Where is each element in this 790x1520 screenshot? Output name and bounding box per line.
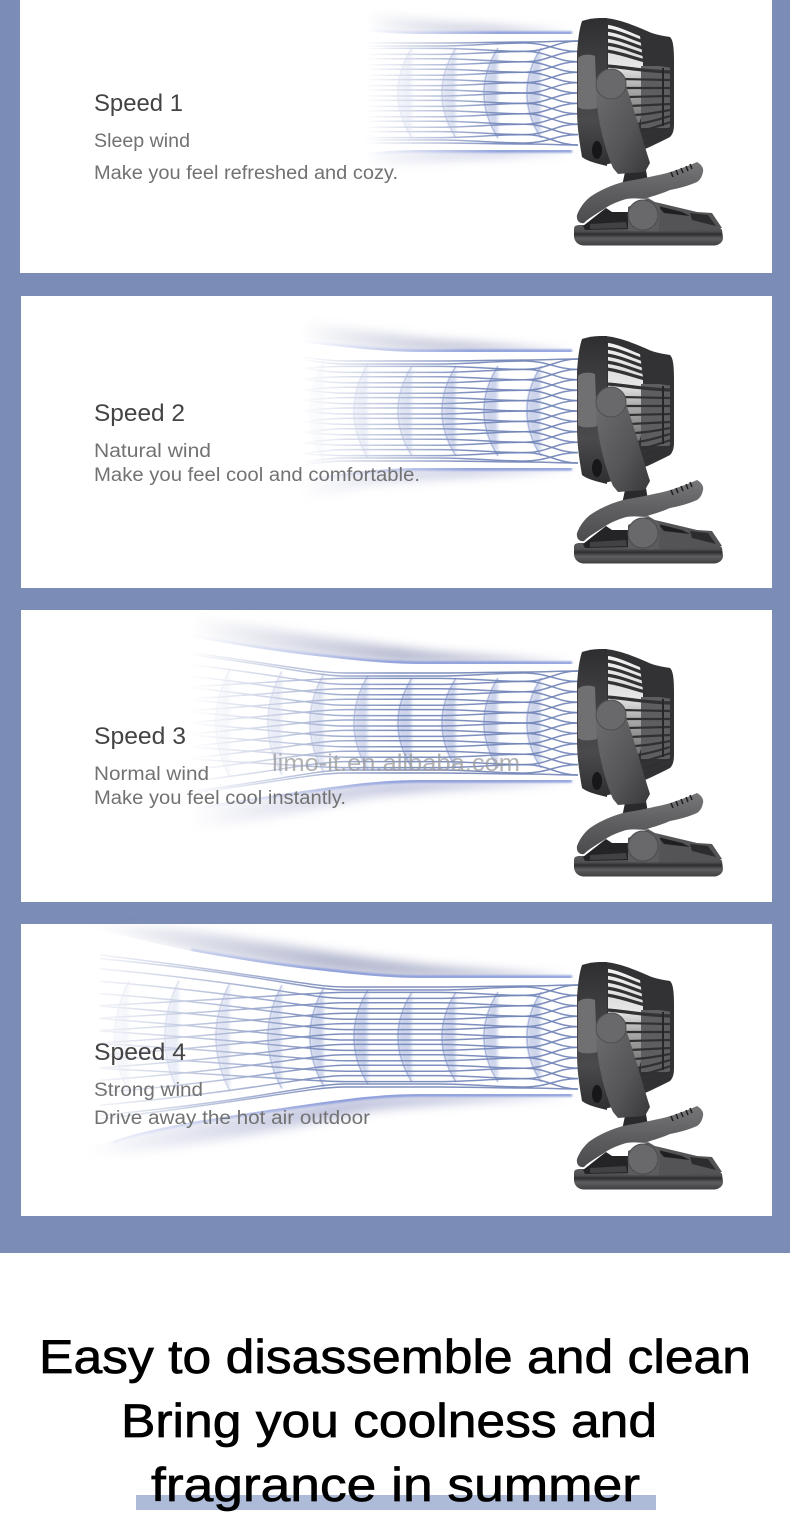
heading: speed 2: Speed 2 <box>94 400 185 427</box>
icon: clip fan 1 <box>574 18 723 246</box>
panel: speed 2 <box>21 296 772 588</box>
icon: clip fan 3 <box>574 649 723 876</box>
panel 2 card <box>21 296 772 588</box>
icon: clip fan 2 <box>574 336 723 564</box>
heading: speed 3: Speed 3 <box>94 723 186 750</box>
text: sleep wind: Sleep wind <box>94 131 190 152</box>
heading: speed 1: Speed 1 <box>94 90 183 117</box>
wind lines speed 2 <box>310 327 578 490</box>
wind lines speed 1 <box>374 16 578 164</box>
panel: speed 3 <box>21 610 772 902</box>
watermark: limo-it.en.alibaba.com <box>272 750 520 777</box>
title <box>39 1330 751 1511</box>
icon: clip fan 4 <box>574 962 723 1190</box>
heading: speed 4: Speed 4 <box>94 1039 186 1066</box>
panel 3 card <box>21 610 772 902</box>
text: speed 2 description: Make you feel cool and comfortable. <box>94 465 420 486</box>
text: speed 1 description: Make you feel refreshed and cozy. <box>94 163 398 184</box>
text: speed 3 description: Make you feel cool instantly. <box>94 788 346 809</box>
title: Bring you coolness and <box>121 1394 657 1447</box>
wind lines speed 4 <box>69 926 578 1152</box>
text: speed 4 description: Drive away the hot air outdoor <box>94 1108 371 1129</box>
panel 1 card <box>20 0 772 273</box>
panel 4 card <box>21 924 772 1216</box>
text: normal wind: Normal wind <box>94 764 209 785</box>
title: fragrance in summer <box>151 1458 640 1511</box>
title: Easy to disassemble and clean <box>39 1330 751 1383</box>
panel: speed 1 <box>20 0 772 273</box>
wind lines speed 3 <box>204 624 578 822</box>
panel: speed 4 <box>21 924 772 1216</box>
text: natural wind: Natural wind <box>94 441 211 462</box>
text: strong wind: Strong wind <box>94 1080 203 1101</box>
highlight band under title <box>136 1495 656 1510</box>
